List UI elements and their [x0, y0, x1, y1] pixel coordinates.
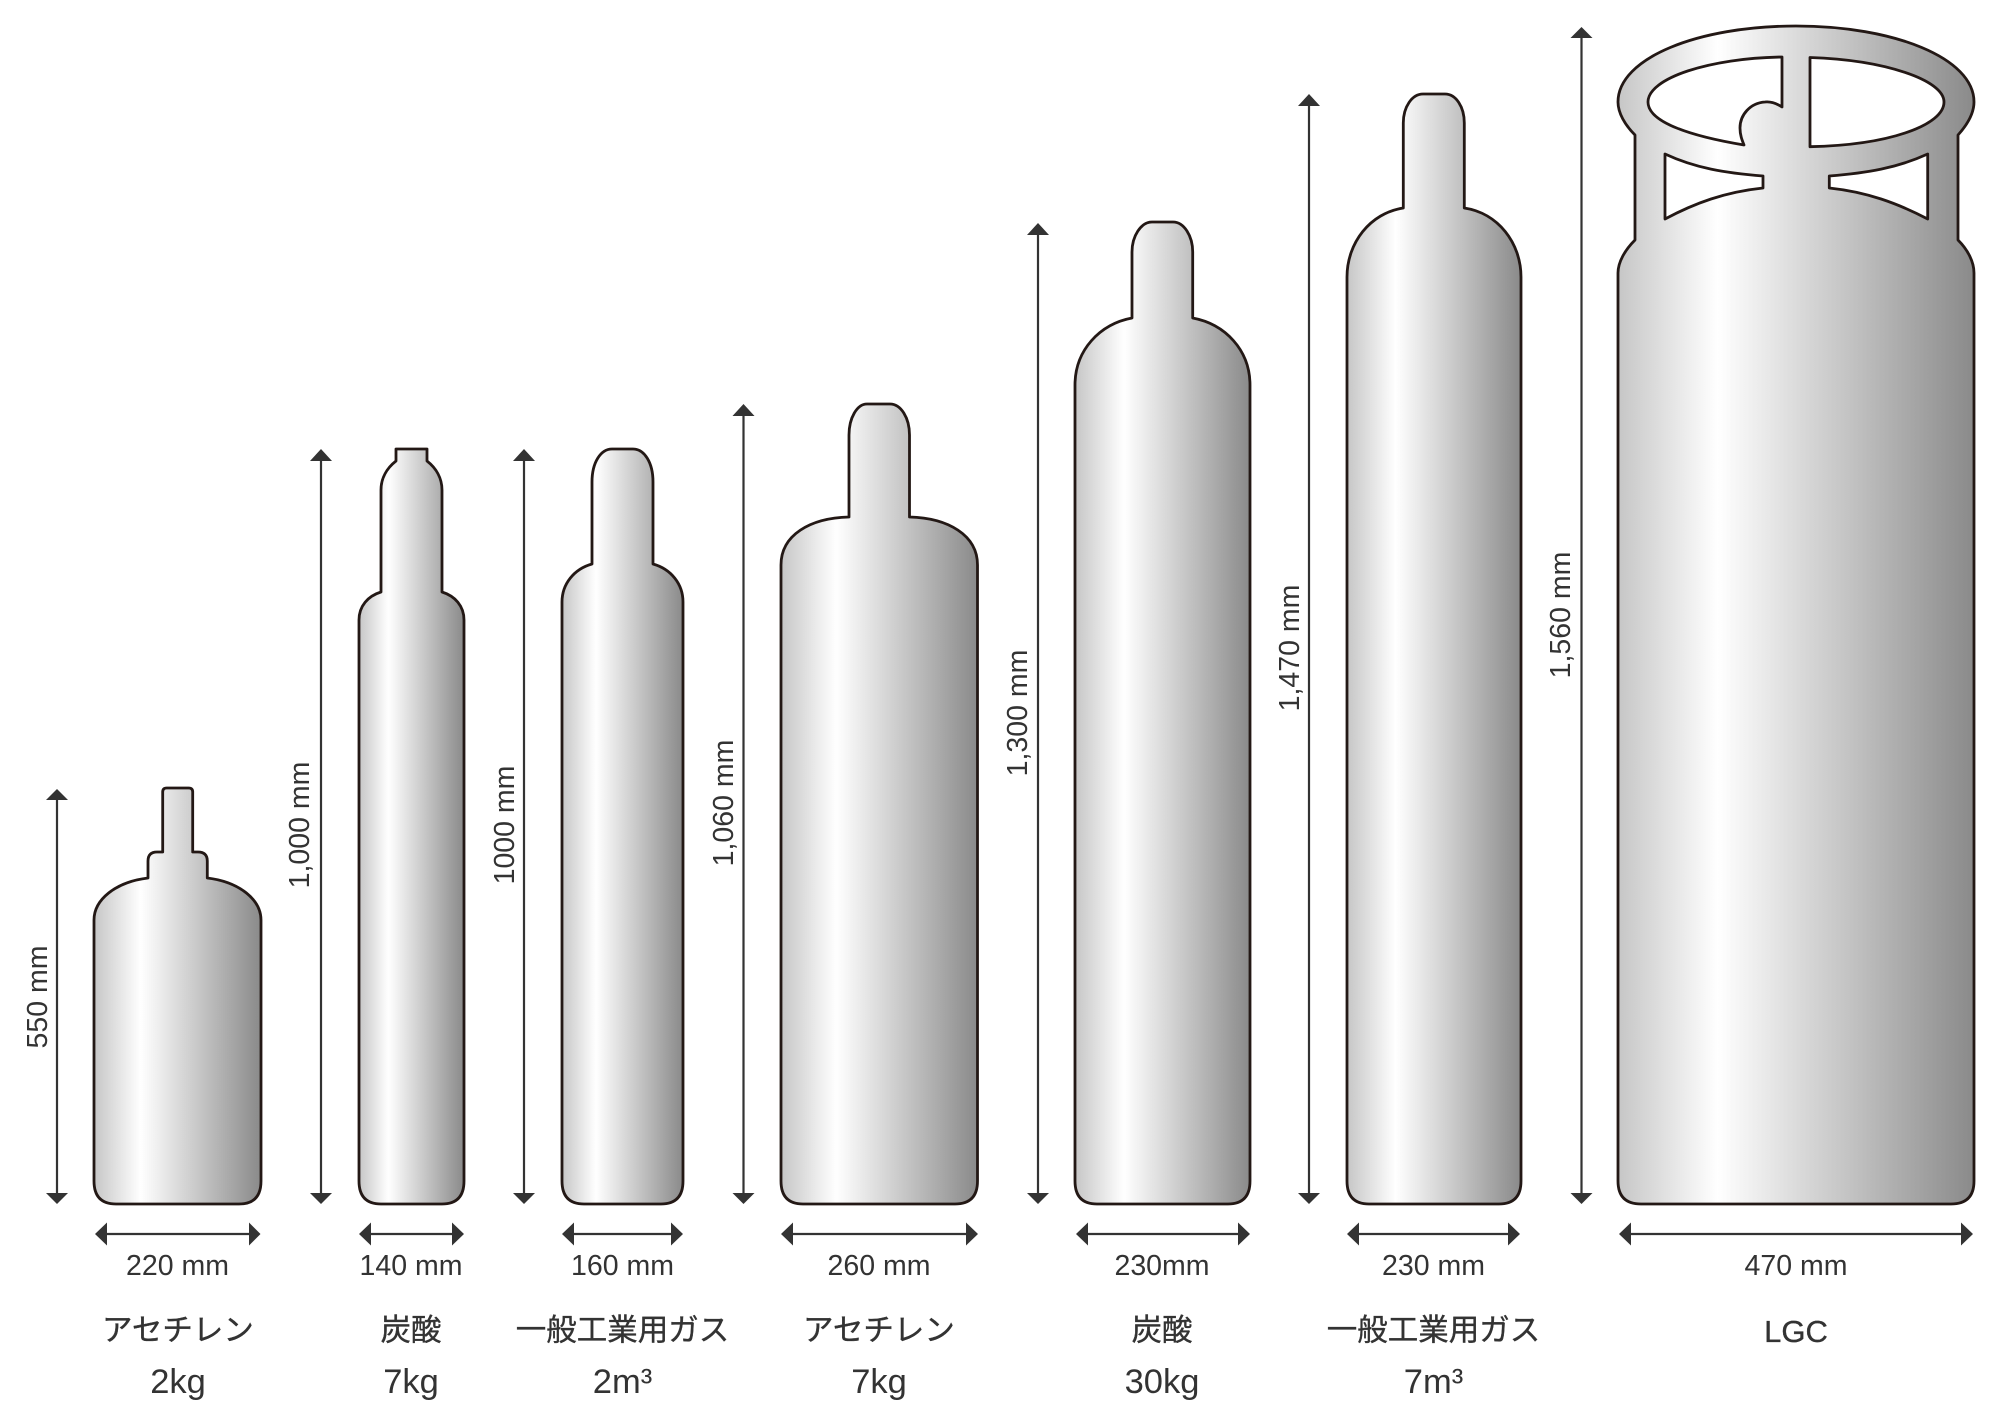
arrow: height 1,560 mm — [1570, 27, 1592, 1204]
label: capacity: 2m³ — [593, 1363, 652, 1401]
label: height 1,300 mm: 1,300 mm — [1002, 650, 1034, 776]
cylinder: acetylene 2kg — [94, 788, 261, 1204]
label: gas name: 炭酸 — [1132, 1314, 1192, 1348]
label: gas name: 炭酸 — [380, 1314, 442, 1348]
arrow: width 230 mm — [1347, 1222, 1520, 1246]
cylinder: acetylene 7kg — [781, 404, 978, 1204]
cylinder: industrial gas 7m3 — [1347, 94, 1521, 1204]
label: width 260 mm: 260 mm — [828, 1250, 930, 1282]
arrow: height 1,300 mm — [1027, 223, 1049, 1204]
label: capacity: 2kg — [150, 1363, 206, 1401]
cylinder: carbonic acid 7kg — [359, 449, 464, 1204]
cylinder: industrial gas 2m3 — [562, 449, 683, 1204]
label: height 1,470 mm: 1,470 mm — [1274, 585, 1306, 711]
label: gas name: 一般工業用ガス — [1327, 1314, 1540, 1348]
label: width 230mm: 230mm — [1114, 1250, 1210, 1282]
label: height 1,560 mm: 1,560 mm — [1545, 552, 1577, 678]
label: width 230 mm: 230 mm — [1382, 1250, 1485, 1282]
label: height 1000 mm: 1000 mm — [489, 766, 521, 884]
arrow: width 140 mm — [359, 1222, 464, 1246]
column: LGC — [1545, 26, 1974, 1349]
label: gas name: アセチレン — [803, 1314, 955, 1348]
column: acetylene 2kg — [22, 788, 261, 1401]
arrow: height 1,000 mm — [310, 449, 332, 1204]
label: height 1,060 mm: 1,060 mm — [708, 740, 740, 866]
label: height 1,000 mm: 1,000 mm — [284, 762, 316, 888]
cylinder: carbonic acid 30kg — [1075, 222, 1250, 1204]
column: carbonic acid 30kg — [1002, 222, 1250, 1401]
column: acetylene 7kg — [708, 404, 978, 1401]
arrow: height 1,470 mm — [1298, 94, 1320, 1204]
arrow: height 550 mm — [46, 789, 68, 1204]
label: capacity: 7kg — [851, 1363, 907, 1401]
label: width 140 mm: 140 mm — [360, 1250, 462, 1282]
label: capacity: 30kg — [1125, 1363, 1199, 1401]
label: height 550 mm: 550 mm — [22, 946, 54, 1048]
cylinder: LGC with handle ring — [1618, 26, 1974, 1204]
label: gas name: LGC — [1764, 1314, 1828, 1349]
arrow: width 470 mm — [1619, 1222, 1973, 1246]
label: width 160 mm: 160 mm — [571, 1250, 674, 1282]
arrow: height 1000 mm — [513, 449, 535, 1204]
label: capacity: 7m³ — [1404, 1363, 1463, 1401]
column: carbonic acid 7kg — [284, 449, 464, 1401]
label: width 470 mm: 470 mm — [1745, 1250, 1847, 1282]
label: gas name: アセチレン — [102, 1314, 254, 1348]
arrow: width 160 mm — [562, 1222, 683, 1246]
label: gas name: 一般工業用ガス — [516, 1314, 729, 1348]
label: capacity: 7kg — [383, 1363, 439, 1401]
arrow: width 260 mm — [781, 1222, 978, 1246]
arrow: width 220 mm — [95, 1222, 260, 1246]
column: industrial gas 7m3 — [1274, 94, 1540, 1401]
arrow: width 230mm — [1076, 1222, 1250, 1246]
label: width 220 mm: 220 mm — [126, 1250, 229, 1282]
column: industrial gas 2m3 — [489, 449, 729, 1401]
arrow: height 1,060 mm — [732, 404, 754, 1204]
